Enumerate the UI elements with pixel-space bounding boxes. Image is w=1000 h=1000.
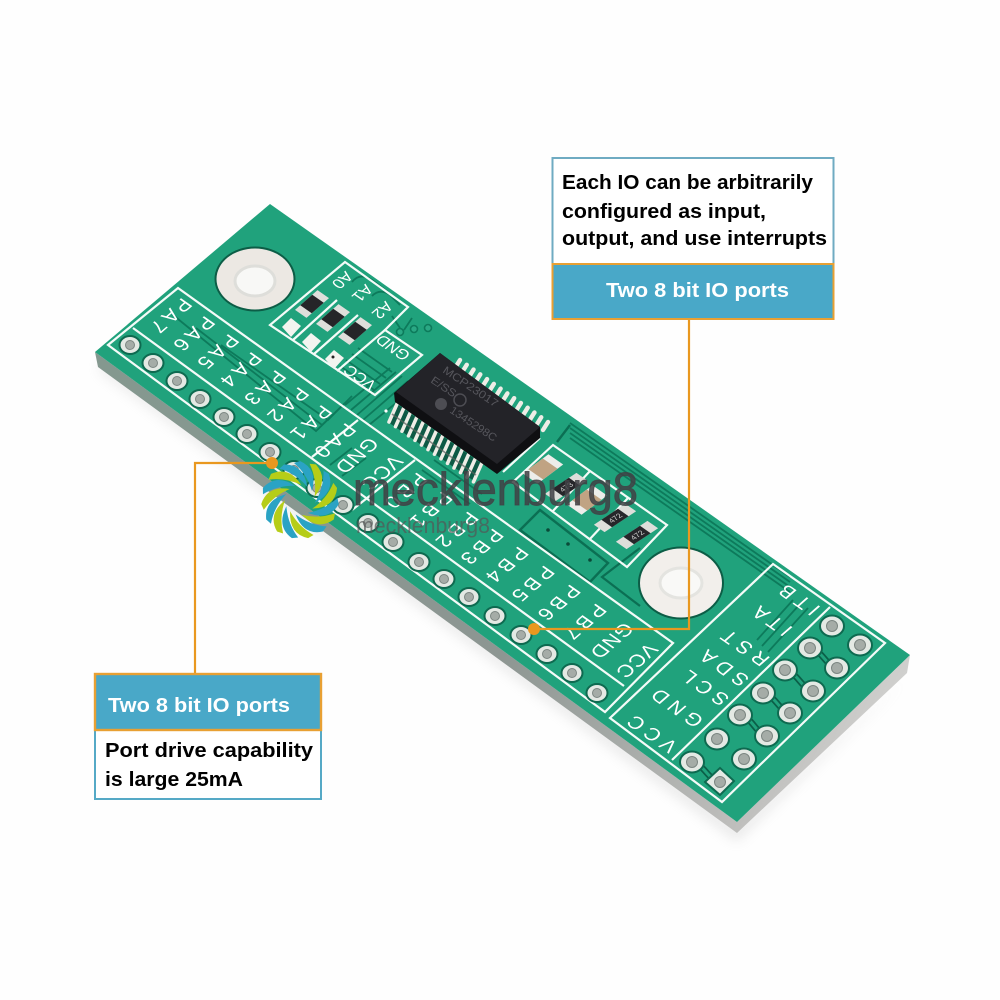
- pin labels: PA7: [142, 294, 196, 339]
- board shadow: [100, 360, 905, 842]
- mounting hole bottom right: [638, 546, 724, 620]
- pin labels: GND: [329, 434, 383, 477]
- pin labels: SDA: [691, 642, 754, 690]
- pin labels: ITB: [770, 577, 825, 619]
- chip pins: [384, 360, 548, 482]
- pin labels: VCC: [355, 451, 407, 494]
- pin labels: RST: [712, 623, 775, 669]
- callout: bottom left: [95, 674, 321, 799]
- circuit board: [95, 204, 910, 842]
- callout description: configured as input,: [562, 200, 766, 223]
- callout header text: Two 8 bit IO ports: [108, 694, 290, 717]
- watermark small text: mecklenburg8: [356, 513, 490, 538]
- pin labels: PB0: [376, 469, 432, 514]
- pin labels: PB3: [452, 525, 508, 570]
- pin labels: A1: [347, 281, 376, 304]
- pin labels: GND: [584, 619, 638, 662]
- vias: [396, 324, 592, 562]
- callout header text: Two 8 bit IO ports: [606, 279, 789, 302]
- board edge: [95, 352, 910, 833]
- watermark large text: mecklenburg8: [353, 463, 638, 515]
- pin labels: VCC: [618, 708, 683, 756]
- chip markings: 1345298C: [447, 405, 499, 445]
- callout body: [95, 730, 321, 799]
- pin labels: PB6: [529, 581, 585, 626]
- pin labels: A0: [327, 268, 356, 291]
- chip markings: MCP23017: [440, 365, 500, 410]
- mounting hole top left: [214, 246, 296, 312]
- callout description: is large 25mA: [105, 768, 243, 791]
- address jumpers: [282, 290, 372, 369]
- pin labels: GND: [373, 331, 415, 363]
- callout header: [95, 674, 321, 730]
- pin labels: VCC: [610, 639, 662, 682]
- surface mount parts: 473: [557, 481, 576, 494]
- pin labels: PA1: [282, 401, 336, 446]
- surface mount parts: [523, 454, 658, 549]
- pin labels: [142, 268, 825, 756]
- pin labels: PB4: [477, 543, 533, 588]
- pin labels: PB5: [503, 562, 559, 607]
- header holes: [680, 616, 872, 795]
- pin labels: PB1: [401, 488, 457, 533]
- pin labels: PA3: [236, 366, 290, 411]
- watermark: [259, 459, 638, 541]
- pin labels: PB7: [555, 600, 611, 645]
- callout body: [552, 158, 834, 265]
- pin labels: PB2: [427, 508, 483, 553]
- callout: top right: [552, 158, 834, 319]
- chip markings: [428, 365, 500, 445]
- pin labels: SCL: [673, 663, 734, 709]
- callout description: [562, 171, 827, 250]
- pin labels: ITA: [743, 599, 798, 639]
- board surface: [95, 204, 910, 822]
- callout header: [552, 264, 834, 319]
- pin labels: PA5: [189, 330, 243, 375]
- pin labels: PA2: [259, 383, 313, 428]
- copper traces: [173, 276, 837, 782]
- callout description: Port drive capability: [105, 739, 314, 762]
- chip: [384, 353, 548, 482]
- pin labels: PA0: [306, 419, 360, 464]
- pin labels: A2: [367, 298, 396, 321]
- callout description: [105, 739, 314, 791]
- callout description: Each IO can be arbitrarily: [562, 171, 814, 194]
- connector: right callout to pin: [528, 319, 689, 635]
- pin labels: PA6: [165, 312, 219, 357]
- chip body: [394, 353, 540, 474]
- surface mount parts: 472: [606, 512, 625, 525]
- chip markings: E/SS: [428, 375, 458, 400]
- surface mount parts: 472: [628, 529, 647, 542]
- connector: left callout to pin: [195, 457, 278, 674]
- watermark swirl logo: [259, 459, 341, 541]
- pin holes: [120, 336, 608, 702]
- pin labels: PA4: [212, 348, 266, 393]
- pin labels: VCC: [340, 362, 381, 392]
- silkscreen frames: [108, 262, 885, 802]
- pin labels: GND: [642, 681, 709, 731]
- callout description: output, and use interrupts: [562, 227, 827, 250]
